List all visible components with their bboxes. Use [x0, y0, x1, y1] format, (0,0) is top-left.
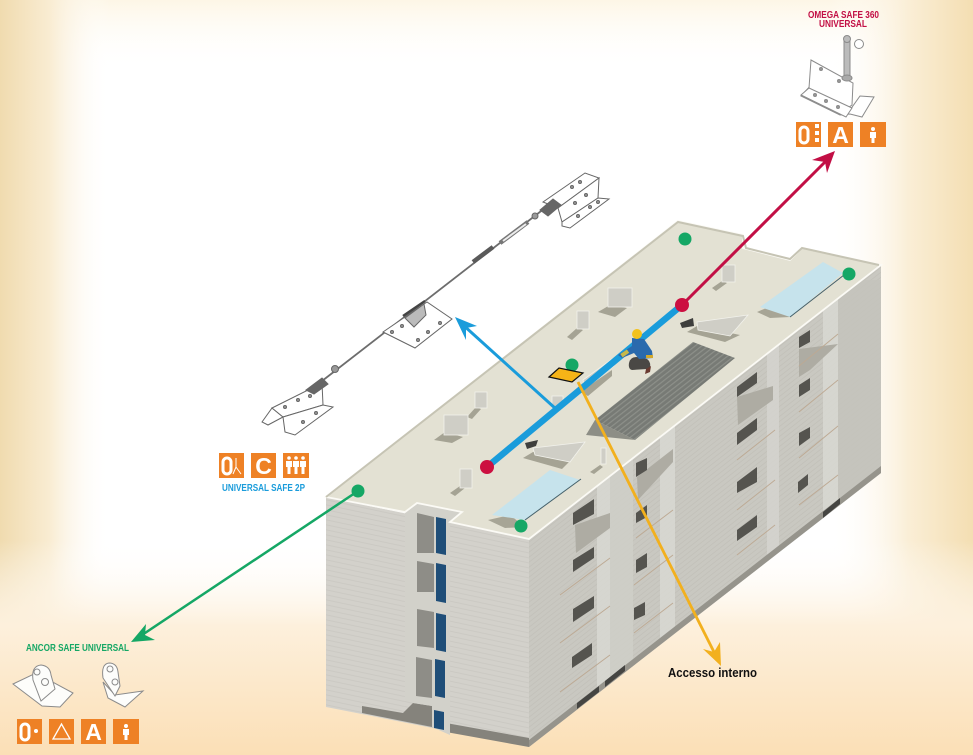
- Omega Safe anchor drawing: [801, 36, 874, 117]
- blue lifeline: [487, 305, 682, 467]
- Universal Safe 2P line drawing: [262, 173, 609, 435]
- green anchor points: [514, 232, 856, 532]
- skylight: front: [488, 470, 581, 528]
- label: Universal Safe 2P: UNIVERSAL SAFE 2P: [222, 483, 305, 494]
- icon row: Omega Safe: [796, 122, 886, 148]
- end bracket: top: [540, 173, 609, 228]
- label: Accesso interno: Accesso interno: [668, 665, 757, 680]
- intermediate bracket: [383, 301, 452, 348]
- Omega Safe 360 title: UNIVERSAL: [819, 18, 867, 30]
- icon: triangle: [49, 719, 74, 744]
- left facade: [326, 497, 529, 747]
- angled anchor: [103, 663, 143, 707]
- balconies: [575, 344, 838, 553]
- worker: [618, 329, 653, 374]
- cable: [322, 208, 545, 381]
- end bracket: bottom: [262, 378, 333, 435]
- balcony rails: [560, 334, 838, 692]
- yellow arrow to internal access: [578, 382, 721, 666]
- stairwell windows: [416, 513, 434, 698]
- blue arrow to Universal Safe: [455, 317, 556, 409]
- icon row: Ancor Safe: [17, 719, 139, 745]
- base of right facade: [529, 466, 881, 747]
- facade bays: [597, 280, 881, 740]
- icon: three users: [283, 453, 309, 478]
- icon: end anchor: [219, 453, 244, 478]
- roof slab: [326, 221, 881, 539]
- icon: single user: [113, 719, 139, 744]
- stairwell: [405, 503, 462, 735]
- roof units: [434, 265, 748, 496]
- icon: single user: [860, 122, 886, 147]
- skylight: rear: [757, 262, 844, 318]
- green arrow to Ancor Safe: [131, 484, 364, 642]
- red arrow to Omega Safe: [480, 151, 835, 474]
- Omega Safe 360 title: [808, 9, 879, 30]
- icon: class C: C: [255, 453, 272, 479]
- base of left facade: [362, 703, 432, 727]
- building: [326, 221, 881, 747]
- icon: class A: A: [832, 122, 849, 148]
- icon: connector and ladder: [796, 122, 821, 147]
- icon: class A: A: [85, 719, 102, 745]
- right facade windows: [572, 330, 810, 668]
- parapet: [326, 222, 879, 497]
- stairwell glazing: [434, 517, 446, 730]
- flat anchor: [13, 665, 73, 707]
- icon row: Universal Safe 2P: [219, 453, 309, 479]
- Ancor Safe anchor drawings: [13, 663, 143, 707]
- yellow hatch marker: [549, 368, 583, 382]
- icon: connector: [17, 719, 42, 744]
- Omega Safe 360 title: OMEGA SAFE 360: [808, 9, 879, 21]
- right facade: [529, 265, 881, 747]
- label: Ancor Safe Universal: ANCOR SAFE UNIVERSAL: [26, 642, 129, 654]
- solar grid: [586, 420, 635, 440]
